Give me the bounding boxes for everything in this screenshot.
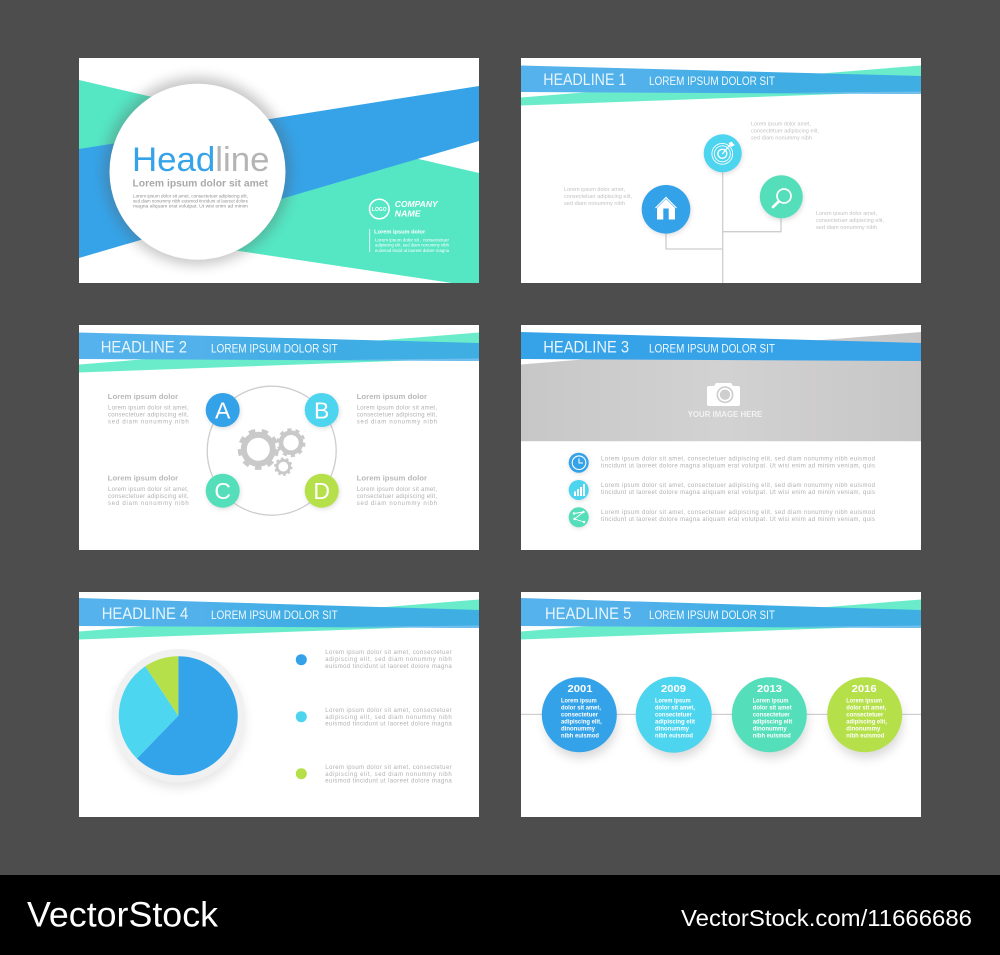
text block C: sed diam nonummy nibh bbox=[108, 501, 189, 507]
text block D bbox=[357, 473, 437, 507]
subtitle: Lorem ipsum dolor sit amet bbox=[132, 178, 268, 190]
panel: headline 2 slide bbox=[79, 325, 479, 550]
text: target bbox=[751, 122, 820, 142]
legend text 1: Lorem ipsum dolor sit amet, consectetuer bbox=[325, 650, 452, 656]
ring bbox=[207, 386, 336, 515]
timeline 2009: Lorem ipsum bbox=[655, 697, 691, 704]
text row 3: tincidunt ut laoreet dolore magna aliquam erat volutpat. Ut wisi enim ad minim veniam, quis bbox=[601, 517, 875, 523]
timeline 2009: dinonummy bbox=[655, 725, 690, 732]
timeline 2016: nibh euismod bbox=[846, 732, 885, 739]
text block D: Lorem ipsum dolor sit amet, bbox=[357, 487, 437, 493]
connector lines bbox=[666, 170, 781, 283]
timeline 2001 bbox=[542, 677, 617, 758]
timeline 2016: 2016 bbox=[852, 683, 877, 695]
company details: Lorem ipsum dolor sit , consectetuer bbox=[375, 238, 449, 243]
icon: camera bbox=[707, 383, 740, 406]
text block D: consectetuer adipiscing elit, bbox=[357, 494, 437, 500]
badge B bbox=[305, 393, 340, 428]
timeline 2013: consectetuer bbox=[753, 711, 790, 718]
icon: gears bbox=[240, 430, 304, 475]
text: home: consectetuer adipiscing elit, bbox=[564, 194, 633, 200]
company details bbox=[369, 229, 449, 253]
logo bbox=[370, 199, 389, 219]
pie slice: blue bbox=[137, 656, 238, 775]
badge A bbox=[206, 393, 240, 428]
image placeholder bbox=[521, 332, 921, 441]
image caption: YOUR IMAGE HERE bbox=[688, 410, 763, 419]
circle shadow bbox=[104, 77, 292, 265]
text block C: Lorem ipsum dolor sit amet, bbox=[108, 487, 189, 493]
legend text 3 bbox=[325, 765, 452, 785]
text row 3: Lorem ipsum dolor sit amet, consectetuer adipiscing elit, sed diam nonummy nibh euismod bbox=[601, 510, 875, 516]
badge C: C bbox=[214, 478, 231, 504]
legend text 2: Lorem ipsum dolor sit amet, consectetuer bbox=[325, 708, 452, 714]
timeline 2013: 2013 bbox=[757, 683, 782, 695]
company name bbox=[395, 199, 439, 219]
text block D: sed diam nonummy nibh bbox=[357, 501, 437, 507]
legend text 3: euismod tincidunt ut laoreet dolore magna bbox=[325, 779, 452, 785]
timeline 2009: consectetuer bbox=[655, 711, 693, 718]
legend dot blue bbox=[296, 654, 307, 665]
heading: HEADLINE 4 bbox=[102, 605, 188, 623]
panel: cover slide bbox=[79, 58, 479, 283]
pie slice: cyan bbox=[119, 666, 178, 758]
panel: headline 5 slide bbox=[521, 592, 921, 817]
header ribbon bbox=[521, 332, 921, 361]
legend text 1: euismod tincidunt ut laoreet dolore magna bbox=[325, 664, 452, 670]
text row 2: tincidunt ut laoreet dolore magna aliquam erat volutpat. Ut wisi enim ad minim veniam, quis bbox=[601, 490, 875, 496]
badge D bbox=[305, 474, 340, 509]
pie slice: lime bbox=[145, 656, 178, 716]
subheading: LOREM IPSUM DOLOR SIT bbox=[649, 341, 775, 355]
timeline 2009: 2009 bbox=[661, 683, 686, 695]
company name: COMPANY bbox=[395, 199, 439, 209]
logo: LOGO bbox=[372, 207, 387, 213]
text block B: Lorem ipsum dolor bbox=[357, 392, 427, 401]
text block B: consectetuer adipiscing elit, bbox=[357, 413, 437, 419]
text block B: sed diam nonummy nibh bbox=[357, 420, 437, 426]
text row 3 bbox=[601, 510, 875, 523]
text: home: Lorem ipsum dolor amet, bbox=[564, 187, 626, 193]
legend text 2: adipiscing elit, sed diam nonummy nibh bbox=[325, 715, 452, 721]
heading: HEADLINE 2 bbox=[101, 338, 187, 356]
icon: target bbox=[704, 134, 742, 174]
icon: search bbox=[760, 175, 804, 220]
icon: share bbox=[569, 507, 589, 528]
text block A bbox=[108, 392, 189, 426]
text: search: Lorem ipsum dolor amet, bbox=[816, 211, 878, 217]
timeline 2001: adipiscing elit, bbox=[561, 718, 602, 725]
intro text: magna aliquam erat volutpat. Ut wisi enim ad minim bbox=[133, 204, 248, 209]
text row 1: tincidunt ut laoreet dolore magna aliquam erat volutpat. Ut wisi enim ad minim veniam, quis bbox=[601, 464, 875, 470]
timeline 2016 bbox=[827, 677, 902, 758]
title: Headline: Headline bbox=[132, 141, 270, 179]
timeline 2009: adipiscing elit bbox=[655, 718, 695, 725]
timeline 2013: adipiscing elit bbox=[753, 718, 792, 725]
icon: bars bbox=[569, 480, 589, 501]
legend text 1 bbox=[325, 650, 452, 670]
icon: home bbox=[642, 185, 691, 235]
text block A: Lorem ipsum dolor bbox=[108, 392, 178, 401]
heading: HEADLINE 3 bbox=[543, 338, 629, 356]
legend text 2 bbox=[325, 708, 452, 728]
intro text: sed diam nonummy nibh euismod tincidunt ut laoreet dolore bbox=[133, 199, 248, 204]
text row 2: Lorem ipsum dolor sit amet, consectetuer adipiscing elit, sed diam nonummy nibh euismod bbox=[601, 483, 875, 489]
panel: headline 3 slide bbox=[521, 325, 921, 550]
timeline 2001: nibh euismod bbox=[561, 732, 599, 739]
text block C: Lorem ipsum dolor bbox=[108, 473, 178, 482]
heading: HEADLINE 5 bbox=[545, 605, 631, 623]
intro text: Lorem ipsum dolor sit amet, consectetuer adipiscing elit, bbox=[133, 193, 248, 198]
text block D: Lorem ipsum dolor bbox=[357, 473, 427, 482]
timeline line bbox=[521, 714, 921, 715]
timeline 2016: Lorem ipsum bbox=[846, 697, 883, 704]
timeline 2016: consectetuer bbox=[846, 711, 884, 718]
company details: adipiscing elit, sed diam nonummy nibh bbox=[375, 243, 449, 248]
footer url: VectorStock.com/11666686 bbox=[681, 905, 972, 931]
subheading: LOREM IPSUM DOLOR SIT bbox=[649, 74, 775, 88]
timeline 2001: consectetuer bbox=[561, 711, 599, 718]
panel: headline 1 slide bbox=[521, 58, 921, 283]
text: search bbox=[816, 211, 885, 231]
text: home bbox=[564, 187, 633, 207]
text block A: sed diam nonummy nibh bbox=[108, 420, 189, 426]
header ribbon bbox=[79, 598, 479, 640]
timeline 2001: Lorem ipsum bbox=[561, 697, 597, 704]
badge A: A bbox=[215, 397, 231, 423]
timeline 2001: dinonummy bbox=[561, 725, 596, 732]
company details: euismod tincid ut laoreet dolore magna bbox=[375, 248, 449, 253]
text block B bbox=[357, 392, 437, 426]
legend text 3: adipiscing elit, sed diam nonummy nibh bbox=[325, 772, 452, 778]
text block C: consectetuer adipiscing elit, bbox=[108, 494, 189, 500]
text block A: Lorem ipsum dolor sit amet, bbox=[108, 406, 189, 412]
timeline 2013: dolor sit amet bbox=[753, 704, 792, 711]
timeline 2013 bbox=[732, 677, 807, 758]
company details: Lorem ipsum dolor bbox=[374, 230, 426, 236]
timeline 2009 bbox=[636, 677, 712, 758]
timeline 2016: dinonummy bbox=[846, 725, 881, 732]
timeline 2009: dolor sit amet, bbox=[655, 704, 695, 711]
text: target: sed diam nonummy nibh bbox=[751, 136, 812, 142]
text: search: consectetuer adipiscing elit, bbox=[816, 218, 885, 224]
legend dot cyan bbox=[296, 711, 307, 722]
heading: HEADLINE 1 bbox=[543, 71, 626, 89]
text row 2 bbox=[601, 483, 875, 496]
timeline 2013: nibh euismod bbox=[753, 732, 791, 739]
subheading: LOREM IPSUM DOLOR SIT bbox=[211, 341, 338, 355]
pie chart bbox=[112, 649, 245, 788]
text block C bbox=[108, 473, 189, 507]
timeline 2001: dolor sit amet, bbox=[561, 704, 601, 711]
company name: NAME bbox=[395, 209, 421, 219]
white circle bbox=[110, 84, 286, 260]
text: home: sed diam nonummy nibh bbox=[564, 201, 625, 207]
badge B: B bbox=[314, 397, 329, 423]
timeline 2016: adipiscing elit, bbox=[846, 718, 887, 725]
badge C bbox=[206, 474, 240, 509]
text block B: Lorem ipsum dolor sit amet, bbox=[357, 406, 437, 412]
header ribbon bbox=[79, 332, 479, 372]
subheading: LOREM IPSUM DOLOR SIT bbox=[649, 608, 775, 622]
header ribbon bbox=[521, 598, 921, 640]
timeline 2001: 2001 bbox=[568, 683, 593, 695]
text row 1: Lorem ipsum dolor sit amet, consectetuer adipiscing elit, sed diam nonummy nibh euismod bbox=[601, 457, 875, 463]
icon: clock bbox=[569, 453, 589, 474]
text: search: sed diam nonummy nibh bbox=[816, 225, 877, 231]
text block A: consectetuer adipiscing elit, bbox=[108, 413, 189, 419]
timeline 2013: Lorem ipsum bbox=[753, 697, 789, 704]
timeline 2013: dinonummy bbox=[753, 725, 787, 732]
blue band bbox=[79, 86, 479, 258]
text: target: Lorem ipsum dolor amet, bbox=[751, 122, 812, 128]
legend text 3: Lorem ipsum dolor sit amet, consectetuer bbox=[325, 765, 452, 771]
text: target: consectetuer adipiscing elit, bbox=[751, 129, 820, 135]
timeline 2016: dolor sit amet, bbox=[846, 704, 887, 711]
legend text 2: euismod tincidunt ut laoreet dolore magna bbox=[325, 722, 452, 728]
timeline 2009: nibh euismod bbox=[655, 732, 693, 739]
footer bar bbox=[0, 875, 1000, 955]
legend text 1: adipiscing elit, sed diam nonummy nibh bbox=[325, 657, 452, 663]
text row 1 bbox=[601, 457, 875, 470]
intro text bbox=[133, 193, 248, 209]
panel: headline 4 slide bbox=[79, 592, 479, 817]
badge D: D bbox=[313, 478, 330, 504]
green band bbox=[79, 80, 479, 283]
legend dot lime bbox=[296, 768, 307, 779]
footer brand: VectorStock bbox=[27, 896, 219, 934]
header ribbon bbox=[521, 66, 921, 106]
subheading: LOREM IPSUM DOLOR SIT bbox=[211, 608, 338, 622]
